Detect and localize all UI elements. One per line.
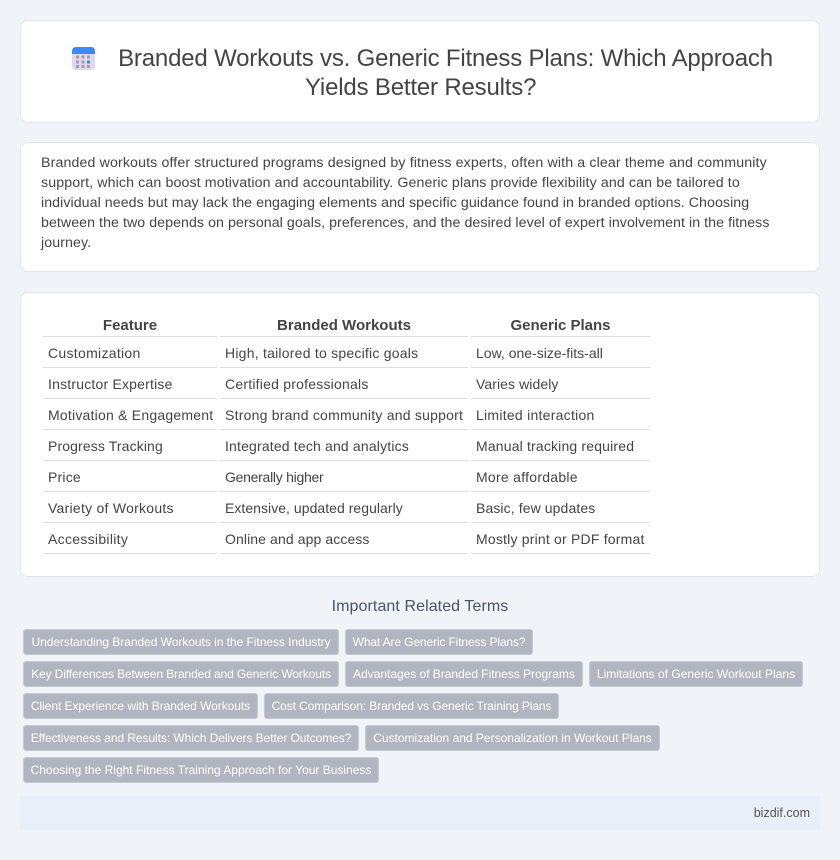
tag list: Cost Comparison: Branded vs Generic Training Plans xyxy=(272,699,551,713)
tag list: Choosing the Right Fitness Training Approach for Your Business xyxy=(31,763,371,777)
tag list: Client Experience with Branded Workouts xyxy=(31,699,250,713)
comparison table: Progress Tracking xyxy=(48,438,163,454)
comparison table: Integrated tech and analytics xyxy=(225,438,409,454)
comparison table xyxy=(43,317,650,554)
comparison table: Customization xyxy=(48,345,141,361)
tag list: What Are Generic Fitness Plans? xyxy=(353,635,525,649)
comparison table: High, tailored to specific goals xyxy=(225,345,418,361)
comparison table: Extensive, updated regularly xyxy=(225,500,403,516)
comparison table: Branded Workouts xyxy=(277,317,411,334)
tag list: Key Differences Between Branded and Generic Workouts xyxy=(31,667,331,681)
comparison table: Variety of Workouts xyxy=(48,500,174,516)
comparison table: Certified professionals xyxy=(225,376,369,392)
comparison table: Low, one-size-fits-all xyxy=(476,345,603,361)
tag list: Advantages of Branded Fitness Programs xyxy=(353,667,575,681)
comparison table: Price xyxy=(48,469,81,485)
comparison table: More affordable xyxy=(476,469,578,485)
footer bar: bizdif.com xyxy=(754,806,810,820)
tag list: Understanding Branded Workouts in the Fitness Industry xyxy=(31,635,331,649)
comparison table: Varies widely xyxy=(476,376,558,392)
panel: title card xyxy=(20,20,820,123)
title: Branded Workouts vs. Generic Fitness Plans: Which Approach xyxy=(118,45,773,72)
comparison table: Accessibility xyxy=(48,531,128,547)
intro text: journey. xyxy=(41,235,91,251)
title xyxy=(118,45,773,101)
comparison table: Feature xyxy=(103,317,157,334)
comparison table: Basic, few updates xyxy=(476,500,595,516)
tag list: Effectiveness and Results: Which Delivers Better Outcomes? xyxy=(31,731,351,745)
intro text: support, which can boost motivation and accountability. Generic plans provide flexibility and can be tailored to xyxy=(41,175,740,191)
intro text: individual needs but may lack the engaging elements and specific guidance found in branded options. Choosing xyxy=(41,195,749,211)
comparison table: Manual tracking required xyxy=(476,438,634,454)
panel: comparison table xyxy=(20,292,820,577)
intro text xyxy=(40,155,770,251)
comparison table: Instructor Expertise xyxy=(48,376,173,392)
intro text: between the two depends on personal goals, preferences, and the desired level of expert involvement in the fitness xyxy=(41,215,770,231)
tag list: Customization and Personalization in Workout Plans xyxy=(373,731,652,745)
comparison table: Online and app access xyxy=(225,531,370,547)
intro text: Branded workouts offer structured programs designed by fitness experts, often with a clear theme and community xyxy=(41,155,767,171)
title: Yields Better Results? xyxy=(305,74,536,101)
comparison table: Generally higher xyxy=(225,469,323,485)
tag list: Limitations of Generic Workout Plans xyxy=(597,667,795,681)
comparison table: Limited interaction xyxy=(476,407,595,423)
footer bar xyxy=(20,796,820,830)
tag list xyxy=(23,629,803,783)
comparison table: Generic Plans xyxy=(510,317,611,334)
comparison table: Motivation & Engagement xyxy=(48,407,213,423)
comparison table: Mostly print or PDF format xyxy=(476,531,645,547)
comparison table: Strong brand community and support xyxy=(225,407,463,423)
heading: related terms: Important Related Terms xyxy=(332,598,508,615)
panel: intro card xyxy=(20,142,820,272)
icon: calendar xyxy=(72,47,95,70)
